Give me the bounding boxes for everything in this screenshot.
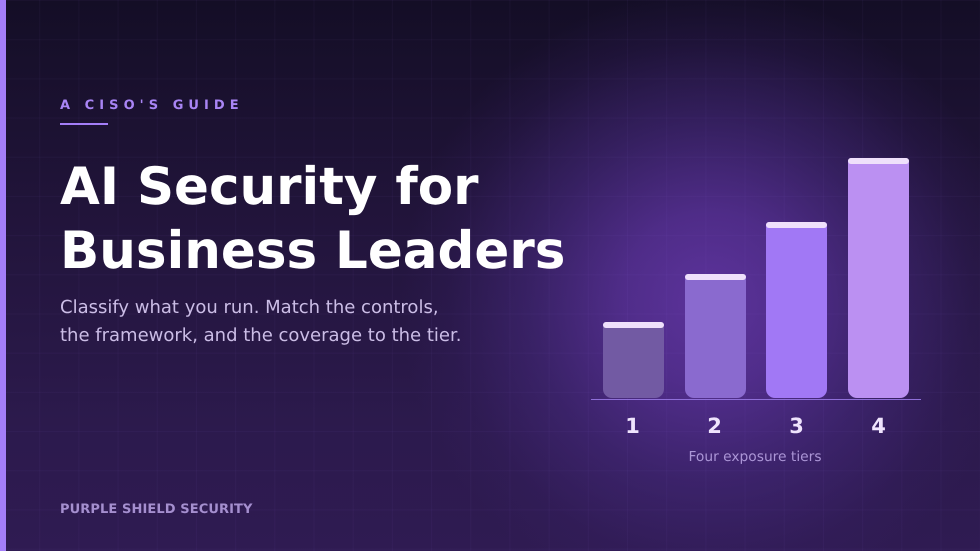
bar: tier 4 bbox=[848, 158, 909, 398]
eyebrow underline bbox=[60, 123, 108, 125]
tier label 3: 3 bbox=[789, 414, 804, 438]
tier label 2: 2 bbox=[707, 414, 722, 438]
chart caption: Four exposure tiers bbox=[688, 449, 822, 465]
bar: tier 1 bbox=[603, 322, 664, 398]
bar: tier 3 bbox=[766, 222, 827, 398]
title bbox=[60, 157, 565, 281]
subtitle: the framework, and the coverage to the tier. bbox=[60, 325, 461, 346]
subtitle: Classify what you run. Match the controls, bbox=[60, 297, 439, 318]
eyebrow: A CISO'S GUIDE: A CISO'S GUIDE bbox=[60, 98, 244, 113]
tier label 1: 1 bbox=[625, 414, 640, 438]
footer brand: PURPLE SHIELD SECURITY bbox=[60, 502, 253, 517]
title: AI Security for bbox=[60, 157, 479, 217]
accent stripe bbox=[0, 0, 6, 551]
subtitle bbox=[60, 297, 461, 346]
tier label 4: 4 bbox=[871, 414, 886, 438]
baseline bbox=[591, 399, 921, 400]
bar: tier 2 bbox=[685, 274, 746, 398]
title: Business Leaders bbox=[60, 221, 565, 281]
bar chart: four exposure tiers bbox=[591, 158, 921, 465]
